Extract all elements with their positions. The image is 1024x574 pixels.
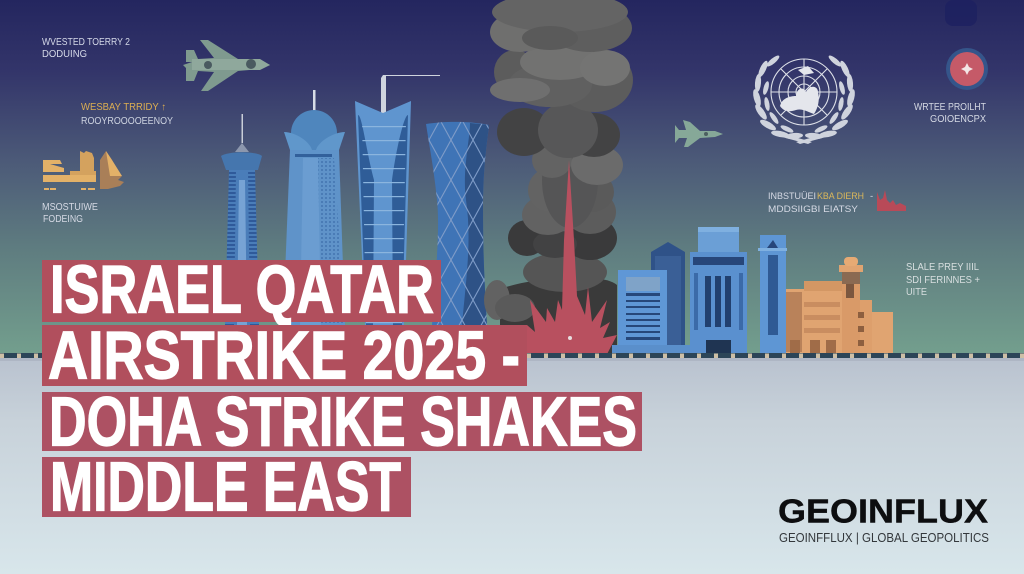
road barrier strip <box>0 353 1024 361</box>
label: gold heading <box>81 102 173 127</box>
label: top left: WVESTED TOERRY 2 <box>42 37 130 48</box>
skyline right buildings <box>612 227 893 355</box>
tower: minaret <box>221 114 262 325</box>
label: lower left <box>42 202 98 225</box>
label: lower left: MSOSTUIWE <box>42 202 98 213</box>
icon: red chart <box>877 190 906 211</box>
icon: fighter jet large <box>183 40 270 91</box>
UN emblem <box>752 54 856 144</box>
label: centre right: MDDSIIGBI EIATSY <box>768 204 859 215</box>
title line 4: MIDDLE EAST <box>50 448 401 526</box>
label: right lower: SDI FERINNES + <box>906 275 980 286</box>
label: right top: GOIOENCPX <box>930 114 986 125</box>
olive wreath <box>752 54 856 144</box>
building: tan complex <box>786 257 893 355</box>
building: dark rear <box>651 242 685 345</box>
dark corner smudge <box>945 0 977 26</box>
label: centre right: KBA DIERH <box>817 191 864 202</box>
tower: twin-peak <box>355 75 440 325</box>
label: right lower: UITE <box>906 287 927 298</box>
title line 1: ISRAEL QATAR <box>50 252 434 328</box>
smoke plume <box>484 0 633 355</box>
label: right top: WRTEE PROILHT <box>914 102 986 113</box>
title line 2: AIRSTRIKE 2025 - <box>48 318 520 394</box>
building: tall centre <box>690 227 747 355</box>
background sky <box>0 0 1024 358</box>
title bars <box>42 252 642 526</box>
tower: domed <box>283 90 345 325</box>
skyline left towers <box>221 75 489 325</box>
globe grid <box>771 59 837 125</box>
building: slim <box>758 235 787 355</box>
label: right lower: SLALE PREY IIIL <box>906 262 979 273</box>
brand tagline: GEOINFFLUX | GLOBAL GEOPOLITICS <box>779 531 989 545</box>
brand name: GEOINFLUX <box>778 492 988 530</box>
label: gold heading: ROOYROOOOEENOY <box>81 116 173 127</box>
title line 3: DOHA STRIKE SHAKES <box>49 382 637 460</box>
label: right lower <box>906 262 980 298</box>
label: centre right <box>768 191 873 215</box>
label: top left: DODUING <box>42 49 87 60</box>
label: lower left: FODEING <box>43 214 83 225</box>
icon: fortress <box>43 151 124 190</box>
label: right top <box>914 102 986 125</box>
tower: lattice <box>426 122 489 325</box>
smoke base <box>500 277 617 355</box>
building: office left <box>612 270 690 355</box>
label: gold heading: WESBAY TRRIDY ↑ <box>81 102 166 113</box>
brand logo <box>778 492 989 545</box>
background ground <box>0 358 1024 574</box>
icon: red badge <box>946 48 988 90</box>
label: centre right: INBSTUÜEI <box>768 191 816 202</box>
icon: fighter jet small <box>675 120 723 147</box>
label: top left <box>42 37 130 60</box>
label: centre right: - <box>870 191 873 202</box>
globe landmass <box>780 66 819 114</box>
explosion burst <box>527 160 617 358</box>
